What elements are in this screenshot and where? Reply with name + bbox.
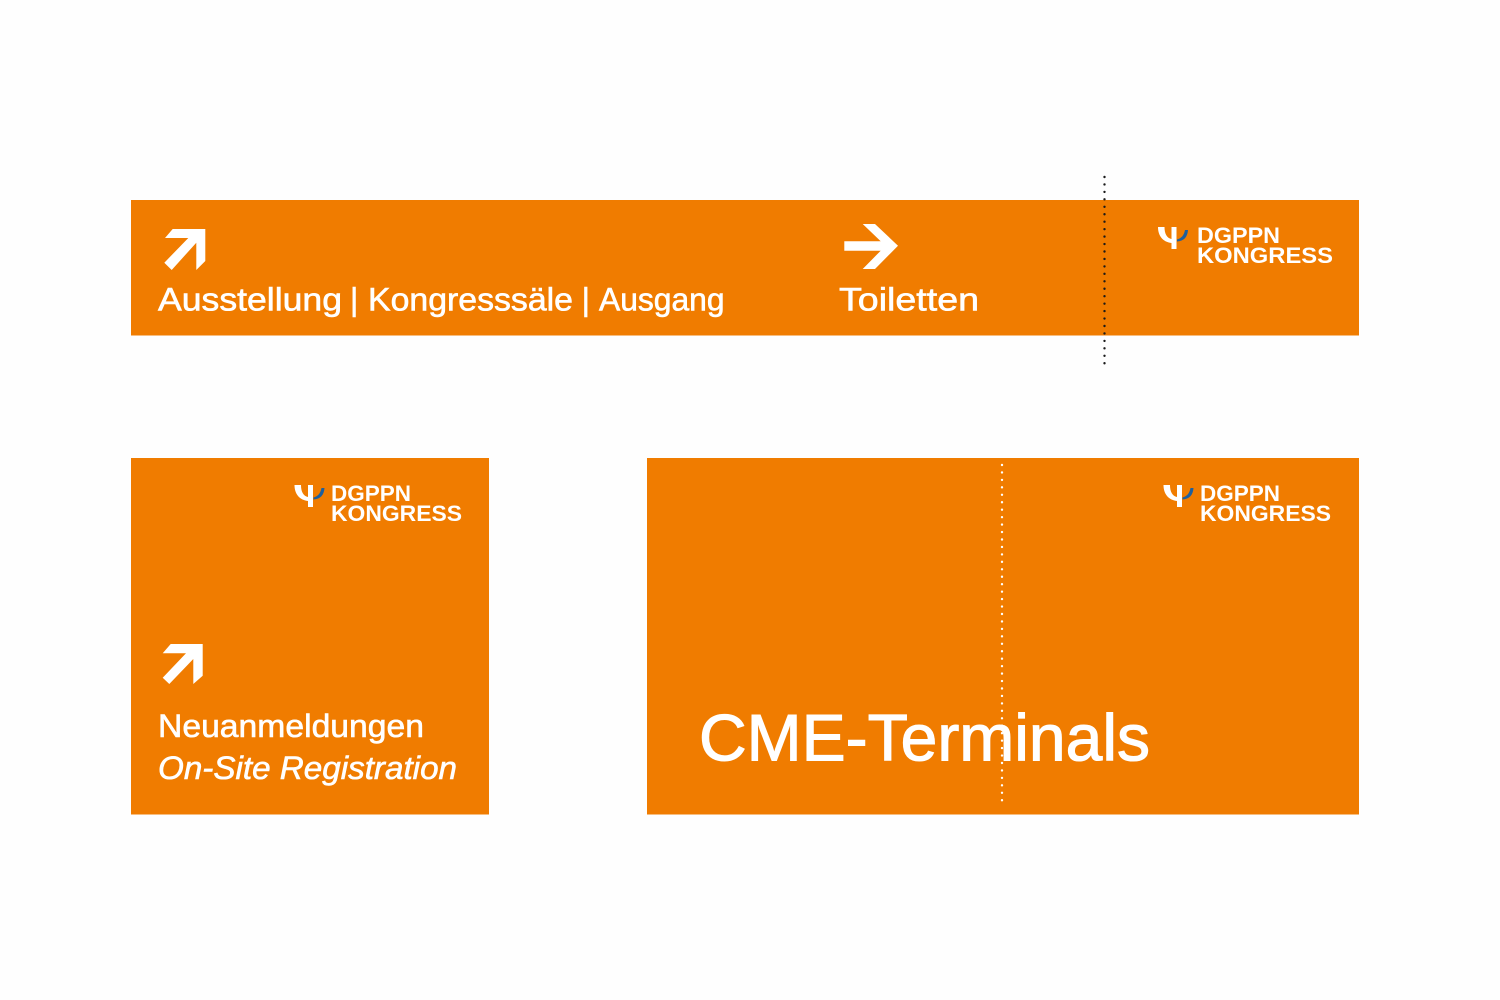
logo: DGPPN Kongress: KONGRESS [1200, 501, 1331, 526]
logo: DGPPN Kongress: DGPPN [331, 481, 411, 506]
panel: CME terminals sign [647, 458, 1359, 814]
icon: north-east arrow [164, 229, 205, 270]
sign background [647, 458, 1359, 814]
German label: Neuanmeldungen [158, 708, 424, 744]
white dotted cut line [1001, 465, 1003, 807]
panel: registration sign [131, 458, 489, 814]
logo: DGPPN Kongress: KONGRESS [1197, 243, 1333, 268]
panel: top wayfinding banner [131, 200, 1359, 336]
CME-Terminals heading: CME-Terminals [699, 700, 1150, 774]
icon: north-east arrow [163, 644, 203, 684]
logo: DGPPN Kongress [1164, 481, 1331, 526]
destinations text: Ausstellung [158, 282, 342, 318]
sign background [131, 458, 489, 814]
destinations text: | [582, 282, 590, 318]
destinations text: Kongresssäle [368, 282, 573, 318]
banner background [131, 200, 1359, 336]
logo: DGPPN Kongress: DGPPN [1200, 481, 1280, 506]
logo: DGPPN Kongress: KONGRESS [331, 501, 462, 526]
logo: DGPPN Kongress [294, 481, 462, 526]
logo: DGPPN Kongress [1158, 223, 1333, 268]
black dotted cut line [1103, 177, 1106, 366]
icon: right arrow [844, 224, 898, 269]
destinations text [158, 282, 724, 318]
toilets text: Toiletten [839, 282, 979, 318]
logo: DGPPN Kongress: DGPPN [1197, 223, 1280, 248]
destinations text: | [350, 282, 358, 318]
destinations text: Ausgang [599, 282, 724, 318]
English label: On-Site Registration [158, 750, 457, 786]
